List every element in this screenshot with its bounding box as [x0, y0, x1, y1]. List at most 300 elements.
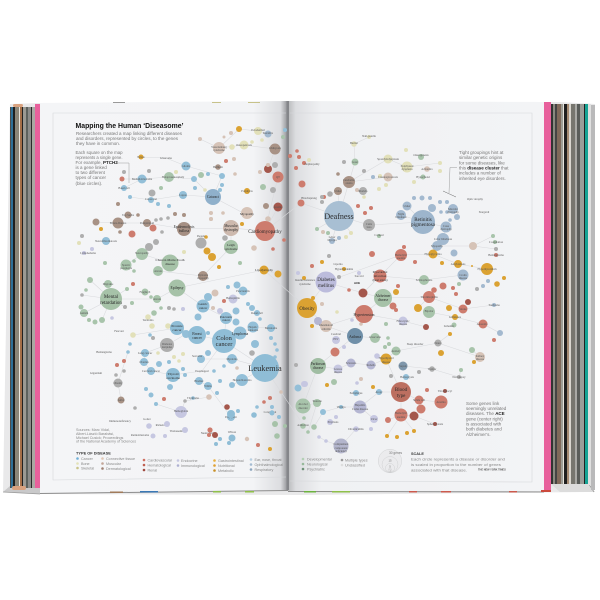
- node: Deafness: [324, 201, 354, 231]
- node labels small, left page: Thymoma: [187, 396, 200, 400]
- node labels small, right page: Spherocytosis: [427, 422, 444, 426]
- legend: type of disease: Metabolic: [218, 469, 234, 473]
- node: Mental retardation: [100, 288, 122, 310]
- node labels small, right page: Spondylodysplasia: [377, 157, 400, 161]
- node labels small, left page: Autism: [80, 311, 89, 315]
- node labels small, right page: Thrombophilia: [420, 295, 438, 299]
- node labels small, left page: Teratoma: [143, 318, 154, 322]
- node: Hypertension: Hypertension: [354, 313, 375, 317]
- node labels small, left page: Migraine: [103, 282, 114, 286]
- node labels small, right page: Addiction: [297, 423, 309, 427]
- node labels small, right page: component: [335, 446, 348, 450]
- node labels small, right page: Fibrocystic: [396, 319, 410, 323]
- node: Myopathy: Myopathy: [240, 212, 254, 216]
- map frames: [53, 113, 532, 482]
- node labels small, left page: [80, 128, 283, 437]
- node labels small, right page: Nail-patella: [362, 134, 377, 138]
- node labels small, left page: Ectodermal: [251, 128, 265, 132]
- node: Mental retardation: Mental: [104, 295, 119, 300]
- node labels small, right page: anemia: [397, 415, 406, 419]
- annotation: PTCH2 gene: Each square on the map: [76, 150, 123, 155]
- node: Epidermolysis bullosa: bullosa: [179, 229, 190, 233]
- nodes: cardiovascular and hematological: [115, 149, 498, 423]
- legend: type of disease: Gastrointestinal: [218, 459, 244, 463]
- node: Cardiomyopathy: [248, 221, 282, 241]
- node labels small, left page: Bladder: [194, 379, 204, 383]
- node labels small, left page: Spastic: [122, 263, 131, 267]
- node labels small, left page: Ichthyosis: [269, 146, 282, 150]
- node labels small, right page: disease: [334, 370, 343, 374]
- scale note: [411, 452, 506, 472]
- node: Diabetes mellitus: [316, 272, 336, 292]
- node: Parkinson disease: disease: [313, 366, 324, 370]
- node labels small, right page: deficiency: [335, 449, 348, 453]
- node: Muscular dystrophy: Muscular: [224, 224, 239, 228]
- pink edge right: [544, 102, 551, 491]
- scale note: THE NEW YORK TIMES: [478, 468, 506, 472]
- legend: type of disease: Ear, nose, throat: [254, 458, 282, 462]
- node labels small, left page: Tay-Sachs: [122, 213, 135, 217]
- nodes: neurological: [78, 135, 497, 434]
- book cover: [3, 102, 595, 495]
- annotation: ACE gene: Alzheimer’s.: [466, 432, 491, 437]
- node labels small, right page: Ischemic: [444, 324, 455, 328]
- legend: type of disease: Skeletal: [81, 466, 94, 470]
- legend: type of disease: Hematological: [148, 464, 171, 468]
- nodes: connective tissue: [198, 131, 485, 400]
- node: Epilepsy: Epilepsy: [171, 286, 184, 290]
- node labels small, right page: Sleep disorder: [407, 342, 423, 346]
- legend: type of disease: Cardiovascular: [148, 458, 173, 462]
- legend: type of disease: Psychiatric: [307, 468, 325, 472]
- node labels small, right page: Hemoptysis: [400, 375, 415, 379]
- node labels small, left page: Goiter: [143, 417, 151, 421]
- node labels small, right page: Complement: [334, 442, 349, 446]
- legend: type of disease: Respiratory: [254, 468, 274, 472]
- legend: type of disease: Neurological: [307, 462, 328, 466]
- node labels small, left page: Rickets: [156, 423, 165, 427]
- node labels small, right page: disease: [459, 276, 468, 280]
- node labels small, right page: anemia: [397, 256, 406, 260]
- node labels small, right page: Achondro: [421, 167, 433, 171]
- node: Prostate cancer: Prostate: [171, 324, 183, 328]
- node labels small, left page: Obesity: [114, 381, 123, 385]
- node: Hypertension: [354, 305, 375, 323]
- node labels small, left page: Neurofibromatosis: [95, 239, 118, 243]
- node labels small, right page: arthritis: [322, 327, 331, 331]
- legend: type of disease: Muscular: [106, 462, 122, 466]
- node labels small, left page: Lymphedema: [80, 251, 97, 255]
- node: Colon cancer: cancer: [216, 341, 233, 348]
- node labels small, right page: Tremor: [428, 367, 436, 371]
- node labels small, right page: Hypothyroidism: [478, 267, 497, 271]
- node labels small, right page: Hyperlipidemia: [335, 267, 354, 271]
- node: Myocardial infarction: (heart attack): [373, 279, 387, 282]
- node labels small, right page: Coagulation: [489, 240, 504, 244]
- node labels small, right page: Epiphyseal: [401, 164, 414, 168]
- node labels small, right page: Sickle cell: [413, 398, 425, 402]
- node labels small, right page: disease: [382, 360, 391, 364]
- annotation: ACE gene: gene (center right): [466, 416, 503, 422]
- annotation: disease cluster: [443, 150, 509, 197]
- node labels small, left page: Retinoblastoma: [131, 433, 150, 437]
- node labels small, right page: Lipoma: [334, 262, 343, 266]
- node labels small, left page: Hemoglobin: [174, 409, 189, 413]
- node labels small, left page: Wilson: [228, 430, 237, 434]
- legend: type of disease: Developmental: [307, 458, 332, 462]
- node: Lipodystrophy: Lipodystrophy: [255, 268, 273, 272]
- node labels small, right page: Cerebral: [331, 332, 341, 336]
- node: Asthma: [347, 328, 363, 344]
- node: Gastric cancer: Gastric: [198, 302, 208, 306]
- node: Leigh syndrome: [224, 240, 238, 254]
- node labels small, left page: Ataxia: [153, 297, 162, 301]
- node labels small, left page: Hemophilia: [226, 296, 241, 300]
- annotation: disease cluster: for some diseases, like: [459, 160, 505, 166]
- node labels small, right page: Hemangioma: [488, 253, 505, 257]
- node labels small, right page: laxa: [367, 225, 372, 229]
- sources: Michael Cusick; Proceedings: [76, 436, 123, 440]
- node labels small, right page: Craniosynostosis: [378, 175, 399, 179]
- node labels small, right page: Osteogenesis: [413, 153, 429, 157]
- node labels small, right page: Cone: [443, 224, 450, 228]
- annotation: ACE gene: Some genes link: [466, 401, 500, 406]
- node: Asthma: Asthma: [349, 335, 361, 339]
- node labels small, right page: Hemolytic: [395, 411, 408, 415]
- sources: Albert-László Barabási,: [76, 432, 114, 436]
- node labels small, right page: Atopy: [375, 390, 383, 394]
- node labels small, left page: myopathy: [197, 276, 209, 280]
- node labels small, left page: insipidus: [162, 345, 173, 349]
- scale circles: 5: [389, 464, 391, 468]
- nodes: gray (multiple types): [80, 160, 498, 410]
- node labels small, right page: Macular: [448, 207, 458, 211]
- intro text: [76, 131, 183, 146]
- node labels small, right page: Myopia: [328, 238, 337, 242]
- node labels small, right page: HIV: [333, 337, 339, 341]
- nodes: renal: [224, 165, 471, 426]
- scale circles: 30 genes: [389, 451, 403, 455]
- sources: of the National Academy of Sciences: [76, 440, 136, 444]
- node: Retinitis pigmentosa: Retinitis: [414, 217, 432, 223]
- node labels small, right page: Rubella: [366, 363, 376, 367]
- node labels small, right page: Usher: [404, 204, 410, 208]
- node: Obesity: Obesity: [299, 307, 315, 312]
- annotation: ACE gene: diseases. The ACE: [466, 411, 505, 416]
- node: Epidermolysis bullosa: [174, 222, 195, 236]
- node labels small, left page: Hemangioma: [96, 350, 113, 354]
- node: Blood type: Blood: [395, 388, 408, 393]
- node labels small, right page: Ulcer: [371, 417, 377, 421]
- node: Myocardial infarction: Myocardial: [373, 270, 387, 274]
- node: Epilepsy: [168, 280, 186, 296]
- node labels small, left page: Thalassemia: [170, 429, 185, 433]
- node labels small, left page: Anemia: [273, 205, 283, 209]
- legend: type of disease: Renal: [148, 468, 157, 472]
- left page: [40, 101, 288, 493]
- legend: type of disease: [76, 450, 368, 473]
- node labels small, right page: Pityriasis: [328, 420, 339, 424]
- sources: [76, 428, 136, 444]
- node labels small, left page: Atrial: [118, 398, 125, 402]
- node: Parkinson disease: [310, 358, 326, 374]
- annotation: ACE gene: seemingly unrelated: [466, 406, 507, 411]
- node: Prostate cancer: [170, 321, 184, 335]
- node labels small, right page: Glaucoma: [369, 335, 382, 339]
- node labels small, right page: ataxia: [346, 181, 353, 185]
- node: Gastric cancer: [196, 300, 210, 312]
- node labels small, right page: disease: [399, 322, 408, 326]
- node: Colon cancer: Colon: [216, 335, 233, 342]
- node labels small, left page: Myeloma: [226, 357, 238, 361]
- node labels small, right page: Rhabdo: [358, 189, 368, 193]
- node labels small, left page: Pemphigoid: [140, 221, 155, 225]
- legend: type of disease: Multiple types: [345, 458, 368, 462]
- node labels small, left page: Renal cell: [251, 311, 263, 315]
- node: Leigh syndrome: Leigh: [227, 243, 235, 247]
- node labels small, left page: Glaucoma: [160, 156, 173, 160]
- node labels small, left page: Polycystic: [225, 415, 238, 419]
- sources: Sources: Marc Vidal,: [76, 428, 110, 432]
- node: Myocardial infarction: infarction: [374, 274, 387, 278]
- scale circles: 1: [389, 468, 391, 472]
- node labels small, right page: Hepatitis: [355, 403, 366, 407]
- node labels small, left page: Esophageal: [195, 369, 209, 373]
- node: Thyroid carcinoma: [166, 368, 181, 382]
- legend: type of disease: TYPE OF DISEASE: [76, 450, 111, 456]
- node labels small, left page: Colorectal: [145, 197, 157, 201]
- node labels small, right page: Hypothyroid: [379, 356, 394, 360]
- node labels small, right page: Night: [398, 212, 404, 216]
- scale note: Each circle represents a disease or disorder and: [411, 458, 505, 462]
- node labels small, right page: Diverticulitis: [348, 427, 364, 431]
- annotation: PTCH2 gene: For example, PTCH2: [76, 160, 118, 165]
- node labels small, left page: QT: [276, 175, 280, 179]
- nodes: ophthalmological: [264, 130, 503, 336]
- node: Epidermolysis bullosa: Epidermolysis: [174, 225, 195, 229]
- node labels small, left page: Wilms: [204, 384, 213, 388]
- annotation: PTCH2 gene: represents a single gene.: [76, 155, 122, 160]
- scale circles: 15: [388, 458, 392, 462]
- node: Retinitis pigmentosa: pigmentosa: [411, 222, 436, 228]
- node: Diabetes mellitus: mellitus: [318, 284, 334, 289]
- node: Cataract: [205, 189, 221, 205]
- node: Alzheimer disease: [374, 289, 392, 307]
- node labels small, left page: Lupus: [179, 193, 187, 197]
- node: Gastric cancer: cancer: [199, 306, 208, 310]
- node: Deafness: Deafness: [324, 212, 354, 221]
- legend: type of disease: Ophthalmological: [254, 463, 283, 467]
- lower left network nodes: [146, 410, 287, 451]
- node labels small, right page: disease: [476, 357, 485, 361]
- node: Breast cancer: [188, 326, 206, 344]
- node labels small, left page: Fragile X: [140, 290, 151, 294]
- node labels small, right page: Narcolepsy: [452, 375, 466, 379]
- node labels small, left page: Melanoma: [265, 326, 278, 330]
- legend: type of disease: Cancer: [81, 457, 94, 461]
- node labels small, right page: syndrome: [299, 282, 311, 286]
- node: Breast cancer: cancer: [192, 336, 203, 340]
- node labels small, left page: Sarcoma: [192, 354, 203, 358]
- node labels small, right page: Thrombocyt: [438, 389, 452, 393]
- node labels small, right page: Sarcoid: [355, 274, 364, 278]
- node labels small, right page: Color blindness: [434, 237, 453, 241]
- node labels small, left page: Nevus: [137, 155, 146, 159]
- node: Muscular dystrophy: dystrophy: [224, 228, 238, 232]
- node labels small, right page: Corneal: [374, 233, 384, 237]
- node: Thyroid carcinoma: Thyroid: [168, 372, 179, 376]
- node labels small, left page: Neutropenia: [201, 431, 216, 435]
- nodes: metabolic and nutritional: [99, 126, 506, 439]
- node labels small, left page: Basal cell: [118, 186, 130, 190]
- node labels small, left page: Ovarian: [139, 360, 149, 364]
- node labels small, right page: Vitiligo: [337, 405, 346, 409]
- node labels small, right page: Bartter: [350, 141, 358, 145]
- node labels small, right page: blindness: [396, 215, 407, 219]
- node: Parkinson disease: Parkinson: [311, 362, 325, 366]
- node labels small, right page: Anemia: [436, 400, 446, 404]
- node labels small, left page: Glioma: [182, 164, 191, 168]
- node: Pancreatic cancer: Pancreatic: [220, 315, 233, 319]
- node labels small, left page: Ehlers-Danlos: [110, 221, 127, 225]
- node labels small, right page: Tourette: [312, 399, 323, 403]
- node labels small, right page: Insulin resistance: [295, 278, 316, 282]
- scale note: SCALE: [411, 452, 424, 456]
- node: Colon cancer: [212, 329, 236, 353]
- node: Leukemia: [248, 354, 282, 382]
- legend: type of disease: Connective tissue: [106, 457, 135, 461]
- node labels small, right page: Kidney: [476, 354, 485, 358]
- node: Charcot-Marie-Tooth disease: Charcot-Marie-Tooth: [156, 258, 185, 262]
- node labels small, left page: Osteopetrosis: [236, 143, 253, 147]
- annotation: ACE gene: both diabetes and: [466, 426, 502, 432]
- node: Cardiomyopathy: Cardiomyopathy: [248, 230, 282, 235]
- node: Blood type: [391, 382, 411, 402]
- annotation: disease cluster: similar genetic origins: [459, 155, 503, 160]
- node labels small, right page: disorder: [298, 406, 308, 410]
- node labels small, right page: Optic atrophy: [467, 197, 484, 201]
- pink edge left: [35, 104, 40, 488]
- node labels small, right page: Amyloidosis: [451, 262, 466, 266]
- node: Prostate cancer: cancer: [172, 328, 182, 332]
- node labels small, right page: Usher: [335, 189, 341, 193]
- node labels small, left page: Gigantism: [90, 371, 103, 375]
- annotation: disease cluster: includes a number of: [459, 170, 502, 176]
- legend: type of disease: Unclassified: [345, 464, 365, 468]
- nodes: endocrine and immunological: [82, 247, 408, 454]
- annotation: disease cluster: this disease cluster that: [459, 166, 509, 170]
- node labels small, left page: paraplegia: [120, 266, 133, 270]
- intro text: and disorders, represented by circles, to the genes: [76, 136, 179, 141]
- node labels small, right page: Rheumatoid: [319, 323, 334, 327]
- network links: [82, 129, 500, 446]
- node labels small, left page: Pancreatitis: [236, 289, 251, 293]
- annotation: PTCH2 gene: is a gene linked: [76, 165, 107, 170]
- node labels small, right page: Stargardt: [479, 210, 489, 214]
- node labels small, right page: Graves: [334, 367, 343, 371]
- right page: [288, 101, 544, 491]
- node labels small, right page: Sepsis: [399, 364, 408, 368]
- node labels small, right page: dysplasia: [402, 167, 413, 171]
- node labels small, left page: Porphyria: [241, 189, 253, 193]
- node labels small, right page: Nephropathy: [304, 162, 320, 166]
- intro text: they have in common.: [76, 141, 120, 146]
- node labels small, right page: ACE: [354, 281, 360, 285]
- node labels small, left page: adenoma: [248, 328, 259, 332]
- node labels small, left page: Holoprosencephaly: [162, 175, 185, 179]
- node labels small, right page: Gallstones: [449, 315, 462, 319]
- node labels small, left page: Immunodeficiency: [109, 419, 131, 423]
- annotation: disease cluster: Tight groupings hint at: [459, 150, 504, 155]
- node: Thyroid carcinoma: carcinoma: [166, 376, 181, 380]
- node labels small, right page: Stroke: [459, 307, 467, 311]
- node labels small, right page: Sclerosis: [346, 361, 357, 365]
- page stack: left: [10, 104, 35, 490]
- nodes: muscular and dermatological: [92, 144, 355, 404]
- crease: [286, 101, 289, 490]
- node: Breast cancer: Breast: [192, 332, 202, 336]
- scale circles: [378, 449, 403, 473]
- annotation: ACE gene: [466, 401, 507, 437]
- legend: type of disease: Dermatological: [106, 467, 131, 471]
- node labels small, right page: Gout: [352, 160, 358, 164]
- node: Cataract: Cataract: [207, 195, 219, 199]
- node labels small, right page: Schizophrenia: [416, 278, 433, 282]
- node: Leigh syndrome: syndrome: [224, 247, 238, 251]
- node: Mental retardation: retardation: [100, 301, 122, 306]
- node labels small, right page: Neuro: [434, 341, 442, 345]
- node labels small, right page: Crohn: [459, 273, 467, 277]
- node labels small, left page: Waardenburg: [211, 145, 227, 149]
- node labels small, left page: Hepatoblastoma: [233, 378, 252, 382]
- node labels small, left page: Cervical cancer: [142, 369, 160, 373]
- node: Muscular dystrophy: [223, 220, 239, 236]
- nodes: cancer: [102, 128, 409, 421]
- node labels small, right page: Leber: [329, 235, 335, 239]
- node: Charcot-Marie-Tooth disease: [156, 254, 185, 272]
- scale note: associated with that disease.: [411, 468, 467, 472]
- node labels small, right page: Hypochond: [416, 175, 430, 179]
- node: Alzheimer disease: Alzheimer: [375, 294, 391, 298]
- node labels small, right page: Cerebellar: [343, 178, 355, 182]
- node: Obesity: [297, 298, 317, 318]
- node labels small, right page: Alcohol: [298, 402, 308, 406]
- node labels small, right page: dystrophy: [447, 210, 459, 214]
- page stack: right: [551, 104, 591, 485]
- node: Diabetes mellitus: Diabetes: [317, 278, 335, 283]
- node: Blood type: type: [397, 394, 406, 399]
- node labels small, left page: syndrome: [213, 148, 225, 152]
- annotation: PTCH2 gene: (blue circles).: [76, 181, 102, 186]
- intro text: Researchers created a map linking different diseases: [76, 131, 183, 136]
- node: Leukemia: Leukemia: [248, 364, 282, 373]
- page edge strips: [40, 102, 551, 494]
- title: Mapping the Human ‘Diseasome’: [76, 121, 184, 130]
- node: Lymphoma: Lymphoma: [232, 332, 249, 336]
- annotation: PTCH2 gene: to two different: [76, 170, 106, 175]
- node labels small, right page: Myopathy: [431, 244, 443, 248]
- annotation: PTCH2 gene: types of cancer: [76, 175, 107, 180]
- node: Retinitis pigmentosa: [411, 210, 436, 234]
- node labels small, left page: Lung cancer: [138, 351, 152, 355]
- node labels small, left page: Neuropathy: [135, 251, 149, 255]
- node: Alzheimer disease: disease: [378, 298, 389, 302]
- legend: type of disease: Nutritional: [218, 464, 235, 468]
- annotation: ACE gene: is associated with: [466, 422, 502, 426]
- node labels small, left page: Pseudo: [197, 234, 206, 238]
- node labels small, right page: dystrophy: [440, 227, 452, 231]
- node labels small, left page: Diabetes: [162, 342, 173, 346]
